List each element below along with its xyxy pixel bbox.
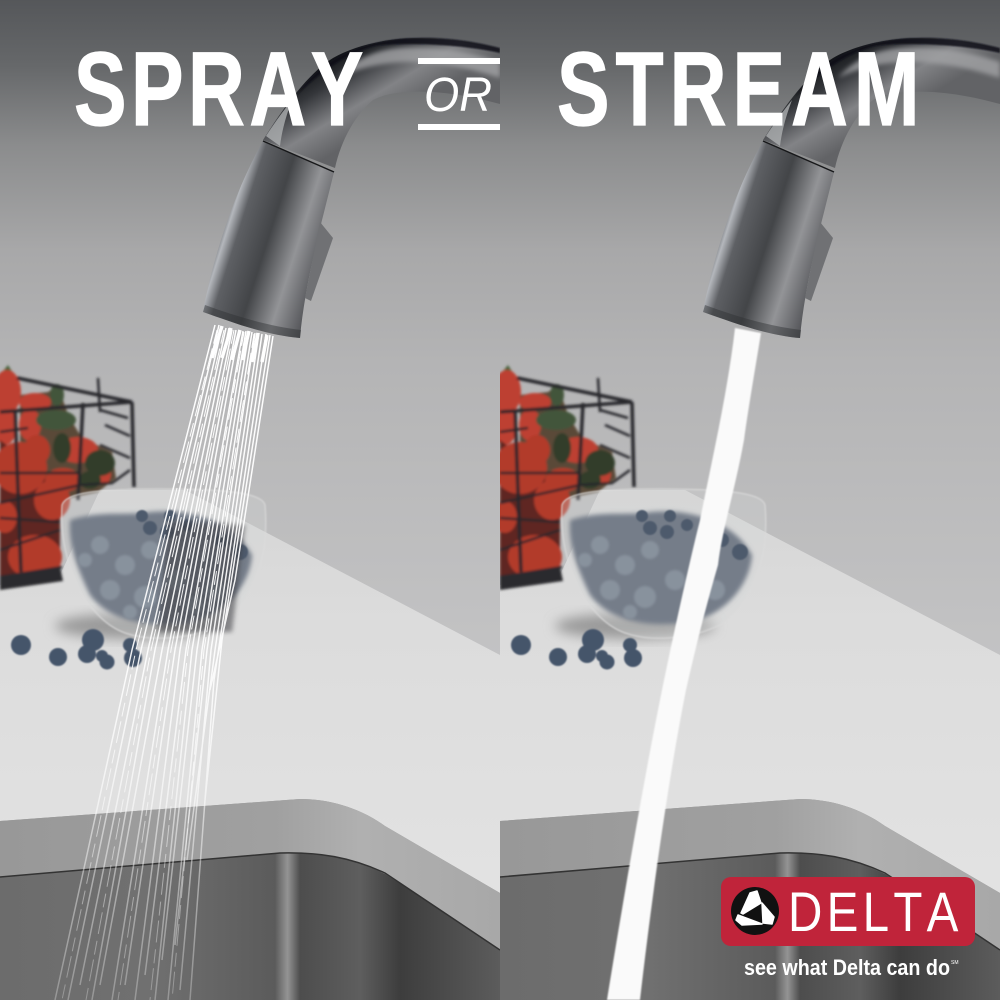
label: OR: OR	[424, 69, 492, 122]
faucet lever	[305, 222, 333, 301]
rules around OR	[418, 58, 500, 130]
background wall	[0, 0, 500, 700]
panel: spray	[0, 0, 500, 1000]
basket of strawberries	[0, 365, 134, 590]
basket of strawberries	[493, 365, 634, 590]
countertop	[0, 490, 500, 893]
countertop	[500, 490, 1000, 893]
logo wordmark: DELTA	[788, 881, 963, 944]
glass bowl of blueberries	[62, 489, 266, 638]
loose blueberries	[511, 629, 642, 670]
sink rim line	[500, 853, 1000, 950]
heading: STREAM: STREAM	[557, 30, 925, 148]
tagline: see what Delta can do	[744, 955, 950, 980]
heading: SPRAY: SPRAY	[74, 30, 368, 148]
Delta logo	[721, 877, 975, 980]
logo badge	[721, 877, 975, 946]
stream of water	[607, 328, 761, 1000]
sink rim line	[0, 853, 500, 950]
sink basin	[0, 853, 500, 1000]
faucet pull-down head	[203, 141, 334, 338]
loose blueberries	[11, 629, 142, 670]
countertop front edge	[0, 799, 500, 950]
bowl shadow	[55, 613, 215, 639]
bowl shadow	[555, 613, 715, 639]
service mark: SM	[951, 960, 958, 966]
logo emblem	[731, 887, 779, 935]
faucet	[703, 38, 1000, 338]
dark tint behind spray	[158, 520, 245, 632]
panel: stream	[493, 0, 1000, 1000]
spray of water	[55, 325, 273, 1000]
faucet	[203, 38, 500, 338]
faucet spout	[263, 38, 500, 168]
countertop front edge	[500, 799, 1000, 950]
background wall	[500, 0, 1000, 700]
glass bowl of blueberries	[562, 489, 766, 638]
sink basin	[500, 853, 1000, 1000]
